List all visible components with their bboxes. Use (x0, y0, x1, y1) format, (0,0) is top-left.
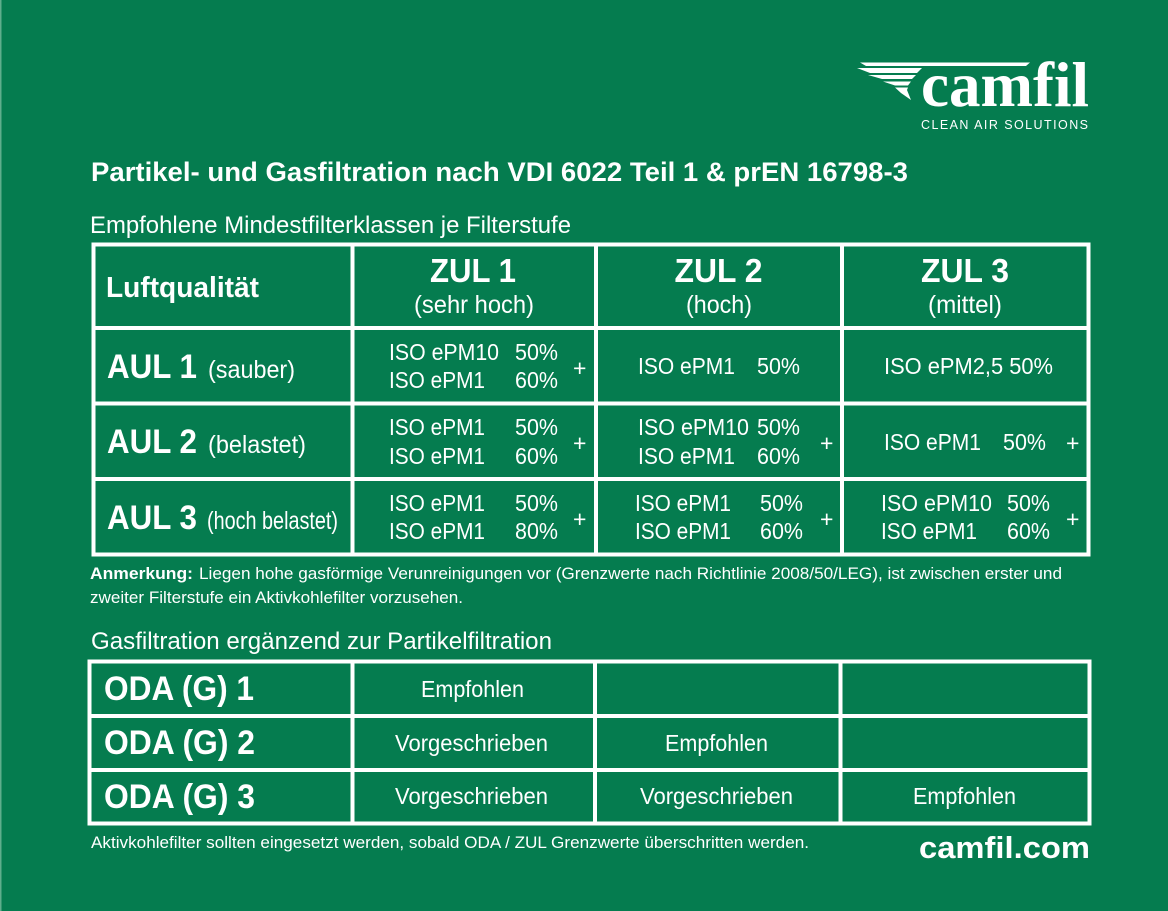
row: AUL 3: 50% (760, 490, 803, 516)
table grid (90, 661, 1090, 824)
website: camfil.com: camfil.com (919, 830, 1090, 865)
row: ODA (G) 3: ODA (G) 3 (104, 778, 255, 816)
row: AUL 2: AUL 2 (107, 423, 197, 461)
header: ZUL 2 (674, 252, 762, 319)
row: ODA (G) 3: Vorgeschrieben (395, 783, 548, 809)
row: AUL 3: + (1066, 506, 1079, 532)
row: AUL 1: (sauber) (208, 356, 295, 384)
logo: camfil (857, 50, 1089, 132)
row: AUL 1: AUL 1 (107, 348, 197, 386)
row: AUL 3: 50% (1007, 490, 1050, 516)
row: AUL 3: ISO ePM10 (881, 490, 992, 516)
row: ODA (G) 3: Vorgeschrieben (640, 783, 793, 809)
row: AUL 2: + (573, 430, 586, 456)
row: AUL 3: ISO ePM1 (635, 518, 731, 544)
row: AUL 3: 60% (1007, 518, 1050, 544)
row: AUL 1: ISO ePM1 (638, 353, 735, 379)
row: AUL 1: ISO ePM2,5 50% (884, 353, 1053, 379)
header: ZUL 3: ZUL 3 (921, 252, 1009, 289)
row: AUL 1 (107, 339, 1053, 393)
heading: gas filtration table: Gasfiltration ergänzend zur Partikelfiltration (91, 628, 552, 655)
header: ZUL 3 (921, 252, 1009, 319)
row: AUL 3: 50% (515, 490, 558, 516)
row: AUL 1: ISO ePM10 (389, 339, 499, 365)
row: AUL 2: + (820, 430, 833, 456)
heading: particle table: Empfohlene Mindestfilterklassen je Filterstufe (90, 212, 571, 239)
row: AUL 1: ISO ePM1 (389, 367, 485, 393)
logo: camfil: CLEAN AIR SOLUTIONS (921, 118, 1088, 132)
row: AUL 3: ISO ePM1 (881, 518, 977, 544)
row: AUL 1: + (573, 355, 586, 381)
row: AUL 3: 60% (760, 518, 803, 544)
row: AUL 2: 60% (757, 443, 800, 469)
row: ODA (G) 2: ODA (G) 2 (104, 724, 255, 762)
note: Anmerkung: Anmerkung: (90, 564, 193, 583)
header: ZUL 1: (sehr hoch) (414, 291, 534, 319)
row: AUL 2: ISO ePM1 (638, 443, 735, 469)
icon: camfil wing (857, 62, 1030, 100)
row: AUL 3: ISO ePM1 (635, 490, 731, 516)
row: AUL 1: 50% (515, 339, 558, 365)
table: particle filter classes (94, 244, 1088, 555)
header: ZUL 1 (414, 252, 534, 319)
footnote: Aktivkohlefilter sollten eingesetzt werden, sobald ODA / ZUL Grenzwerte überschritten werden. (91, 833, 809, 852)
row: ODA (G) 1: ODA (G) 1 (104, 670, 254, 708)
row: AUL 2: 50% (757, 414, 800, 440)
row: AUL 3: ISO ePM1 (389, 518, 485, 544)
row: AUL 3: + (573, 506, 586, 532)
table grid (94, 244, 1088, 555)
row: AUL 2: (belastet) (208, 431, 306, 459)
logo: camfil: camfil (921, 50, 1089, 120)
row: AUL 2: + (1066, 430, 1079, 456)
row: AUL 1: 50% (757, 353, 800, 379)
row: ODA (G) 2: Empfohlen (665, 730, 768, 756)
note: Anmerkung (90, 564, 1062, 607)
row: AUL 2: ISO ePM1 (389, 414, 485, 440)
row: AUL 2: ISO ePM1 (884, 429, 981, 455)
row: AUL 3 (107, 490, 1079, 544)
row: AUL 1: 60% (515, 367, 558, 393)
row: AUL 2: ISO ePM10 (638, 414, 749, 440)
row: ODA (G) 3 (104, 778, 1016, 816)
header: Luftqualität: Luftqualität (106, 272, 259, 304)
row: AUL 2: ISO ePM1 (389, 443, 485, 469)
header: ZUL 1: ZUL 1 (430, 252, 516, 289)
table: gas filtration (90, 661, 1090, 824)
note: Anmerkung: Liegen hohe gasförmige Verunreinigungen vor (Grenzwerte nach Richtlinie 2008/50/LEG), ist zwischen erster und (199, 564, 1062, 583)
row: AUL 3: + (820, 506, 833, 532)
title: Partikel- und Gasfiltration nach VDI 6022 Teil 1 & prEN 16798-3 (91, 157, 908, 187)
note: Anmerkung: zweiter Filterstufe ein Aktivkohlefilter vorzusehen. (90, 588, 463, 607)
row: AUL 2 (107, 414, 1079, 469)
row: ODA (G) 3: Empfohlen (913, 783, 1016, 809)
row: AUL 2: 50% (1003, 429, 1046, 455)
row: ODA (G) 2: Vorgeschrieben (395, 730, 548, 756)
header: ZUL 3: (mittel) (928, 291, 1002, 319)
row: AUL 3: ISO ePM1 (389, 490, 485, 516)
header: ZUL 2: (hoch) (686, 291, 752, 319)
row: AUL 2: 50% (515, 414, 558, 440)
row: AUL 3: AUL 3 (107, 499, 197, 537)
row: ODA (G) 1: Empfohlen (421, 676, 524, 702)
row: AUL 2: 60% (515, 443, 558, 469)
row: ODA (G) 2 (104, 724, 768, 762)
row: ODA (G) 1 (104, 670, 524, 708)
row: AUL 3: (hoch belastet) (207, 507, 338, 535)
row: AUL 3: 80% (515, 518, 558, 544)
header: ZUL 2: ZUL 2 (674, 252, 762, 289)
